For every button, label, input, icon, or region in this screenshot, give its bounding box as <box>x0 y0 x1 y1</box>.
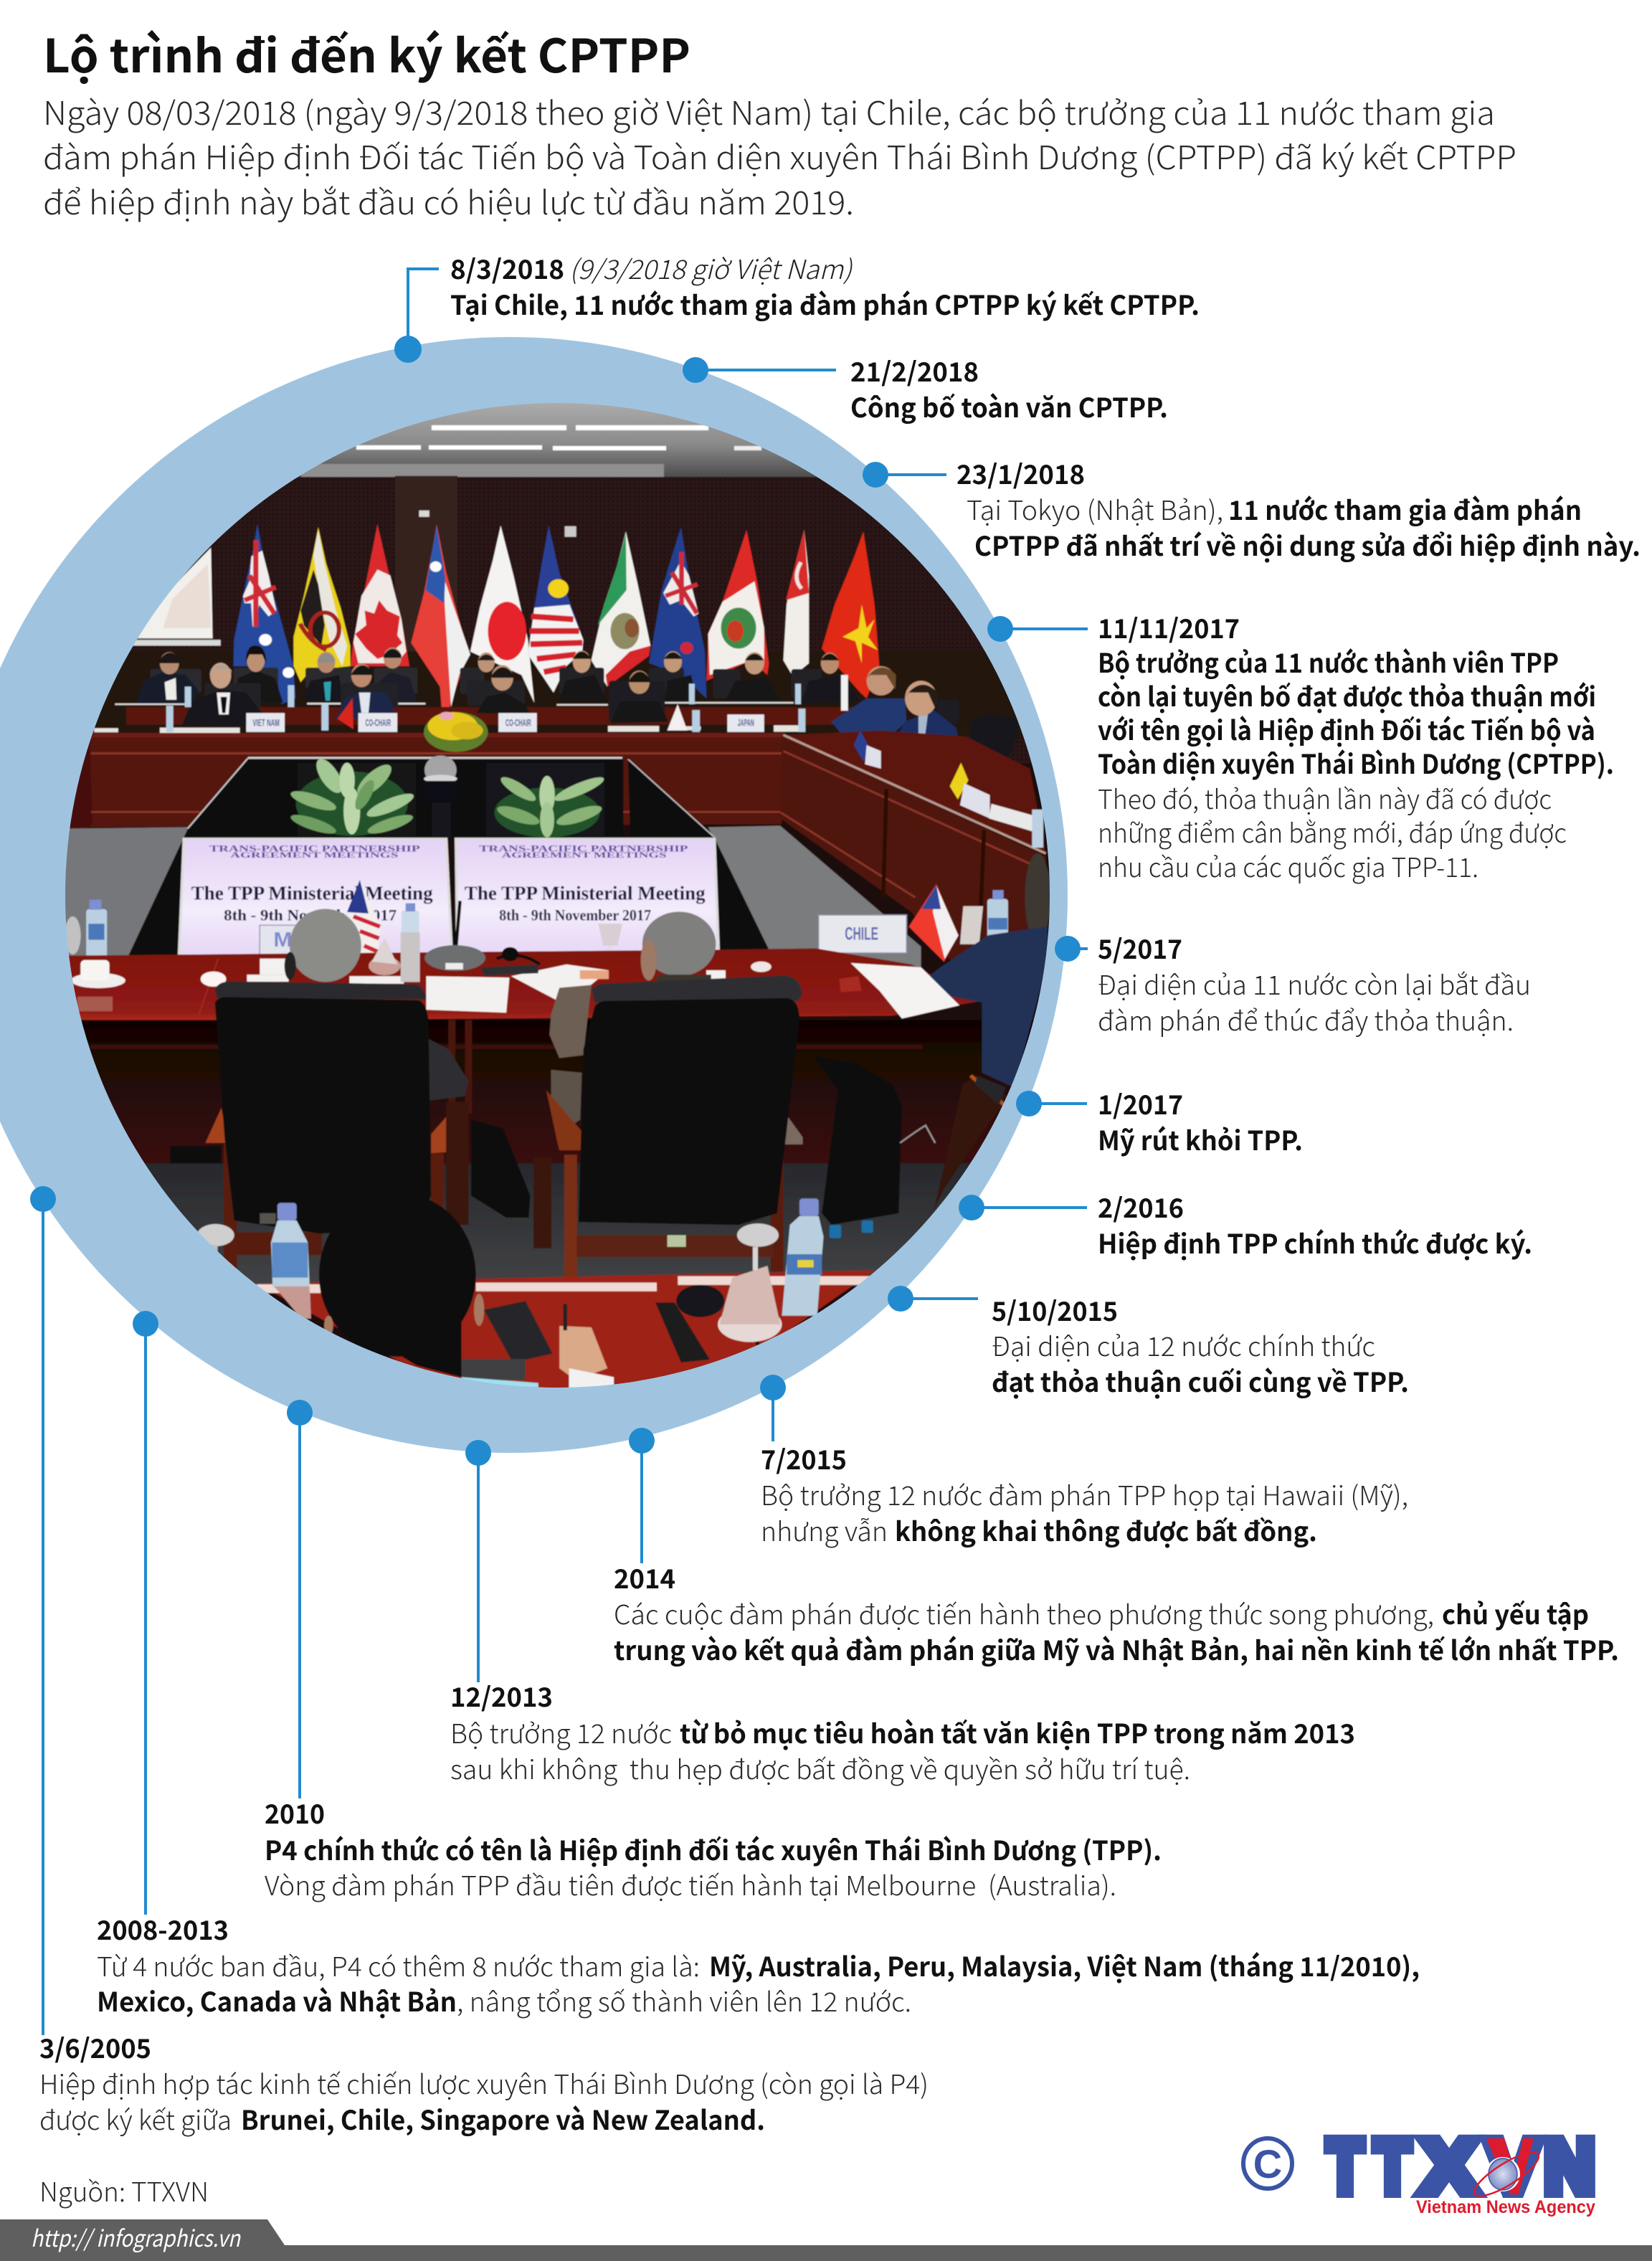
date: 5/10/2015 <box>992 1290 1118 1329</box>
foreground glass and ashtray <box>718 1223 782 1342</box>
description: Hiệp định hợp tác kinh tế chiến lược xuyên Thái Bình Dương (còn gọi là P4) <box>39 2063 929 2102</box>
description: Theo đó, thỏa thuận lần này đã có được <box>1098 778 1552 817</box>
description: P4 chính thức có tên là Hiệp định đối tác xuyên Thái Bình Dương (TPP). <box>265 1829 1162 1868</box>
description: , nâng tổng số thành viên lên 12 nước. <box>457 1981 911 2019</box>
description: Toàn diện xuyên Thái Bình Dương (CPTPP). <box>1098 743 1614 782</box>
connector and dot <box>959 1195 1087 1220</box>
floor left <box>65 826 189 957</box>
description: Tại Tokyo (Nhật Bản), <box>967 489 1223 528</box>
description: với tên gọi là Hiệp định Đối tác Tiến bộ và <box>1098 709 1595 748</box>
table bottle and glass at right <box>960 890 1008 952</box>
left TPP screen: The TPP Ministerial Meeting <box>191 883 433 904</box>
description <box>967 489 1641 564</box>
desk bottle near screens <box>402 904 419 966</box>
intro paragraph: để hiệp định này bắt đầu có hiệu lực từ đầu năm 2019. <box>43 177 854 224</box>
left plant <box>288 755 417 838</box>
right plant <box>494 773 607 838</box>
wine glass on the left <box>197 1224 234 1263</box>
bottles on back table <box>165 683 807 733</box>
luggage <box>812 1055 935 1238</box>
description: Từ 4 nước ban đầu, P4 có thêm 8 nước tham gia là: <box>97 1945 700 1984</box>
description: được ký kết giữa <box>39 2099 232 2138</box>
description: nhưng vẫn <box>761 1510 888 1549</box>
intro paragraph: Ngày 08/03/2018 (ngày 9/3/2018 theo giờ Việt Nam) tại Chile, các bộ trưởng của 11 nước tham gia <box>43 87 1495 134</box>
date: 21/2/2018 <box>850 351 979 389</box>
date: (9/3/2018 giờ Việt Nam) <box>569 248 853 287</box>
foreground left bottle <box>271 1203 311 1319</box>
flags row <box>234 524 879 707</box>
connector and dot <box>1016 1091 1087 1117</box>
water glass by right screen <box>598 924 622 966</box>
blue ring behind photo <box>0 337 1068 1453</box>
date: 5/2017 <box>1098 928 1182 967</box>
description: Đại diện của 12 nước chính thức <box>992 1325 1375 1364</box>
description: Bộ trưởng 12 nước đàm phán TPP họp tại Hawaii (Mỹ), <box>761 1474 1408 1513</box>
paper at right of table <box>850 963 959 1018</box>
timeline event: 5/10/2015 <box>888 1286 1409 1400</box>
timeline event: 7/2015 <box>760 1375 1408 1549</box>
country name cards: JAPAN <box>738 718 754 729</box>
connector and dot <box>629 1428 655 1563</box>
timeline event: 21/2/2018 <box>683 351 1168 425</box>
foreground head <box>319 1193 484 1377</box>
description: nhu cầu của các quốc gia TPP-11. <box>1098 846 1478 885</box>
right navy-suited delegate <box>919 853 1050 1087</box>
left seated man head <box>285 909 361 982</box>
back table panel <box>90 736 782 827</box>
timeline event: 2/2016 <box>959 1187 1532 1261</box>
connector and dot <box>888 1286 978 1312</box>
upper back table <box>115 703 859 725</box>
description <box>265 1829 1162 1903</box>
Malaysia desk flag <box>346 880 381 974</box>
timeline event: 23/1/2018 <box>863 453 1641 564</box>
left chair back <box>215 982 431 1233</box>
description <box>614 1593 1619 1668</box>
date: 8/3/2018 <box>450 248 564 287</box>
left TPP screen: TRANS-PACIFIC PARTNERSHIP <box>209 844 420 854</box>
country name cards <box>246 713 764 732</box>
TTXVN logo <box>1327 2125 1595 2217</box>
left chair wooden frame <box>205 1102 468 1269</box>
circular photo: ministers at conference table <box>65 403 1050 1388</box>
front table <box>65 948 982 1021</box>
connector and dot <box>987 616 1088 642</box>
timeline event: 2014 <box>614 1428 1619 1668</box>
timeline event: 5/2017 <box>1055 928 1531 1038</box>
title: Lộ trình đi đến ký kết CPTPP <box>43 20 690 86</box>
description: Công bố toàn văn CPTPP. <box>850 387 1168 425</box>
right chair back <box>579 975 802 1225</box>
date: 12/2013 <box>450 1676 553 1715</box>
phone and notebook <box>462 1301 553 1388</box>
desk flags <box>338 698 688 731</box>
description: đạt thỏa thuận cuối cùng về TPP. <box>992 1361 1409 1400</box>
right TPP screen: The TPP Ministerial Meeting <box>465 883 706 904</box>
description: Bộ trưởng của 11 nước thành viên TPP <box>1098 642 1559 681</box>
date: 23/1/2018 <box>956 453 1085 492</box>
description: không khai thông được bất đồng. <box>895 1510 1317 1549</box>
description: Mỹ, Australia, Peru, Malaysia, Việt Nam (tháng 11/2010), <box>709 1945 1420 1984</box>
description: sau khi không thu hẹp được bất đồng về quyền sở hữu trí tuệ. <box>450 1748 1190 1787</box>
description <box>992 1325 1409 1400</box>
description: đàm phán để thúc đẩy thỏa thuận. <box>1098 1000 1514 1038</box>
flower arrangement <box>424 712 488 752</box>
description: Mỹ rút khỏi TPP. <box>1098 1119 1303 1158</box>
place card with letter M <box>260 925 300 966</box>
timeline event: 8/3/2018 <box>394 248 1200 363</box>
right TPP screen: AGREEMENT MEETINGS <box>502 851 667 860</box>
description: Brunei, Chile, Singapore và New Zealand. <box>241 2099 765 2138</box>
Chile name card: CHILE <box>845 924 878 944</box>
country name cards: CO-CHAIR <box>505 718 531 729</box>
description: Tại Chile, 11 nước tham gia đàm phán CPTPP ký kết CPTPP. <box>450 284 1200 323</box>
date: 3/6/2005 <box>39 2027 151 2066</box>
description <box>450 1712 1355 1787</box>
connector and dot <box>133 1311 158 1915</box>
date: 2014 <box>614 1558 675 1596</box>
right chair wooden frame <box>533 1090 802 1278</box>
description: Đại diện của 11 nước còn lại bắt đầu <box>1098 964 1531 1002</box>
TTXVN logo: N <box>1544 2125 1595 2209</box>
connector and dot <box>760 1375 786 1441</box>
source note: Nguồn: TTXVN <box>39 2171 209 2209</box>
projection screen <box>133 546 222 647</box>
date: 11/11/2017 <box>1098 607 1240 646</box>
connector and dot <box>683 357 836 383</box>
description: Các cuộc đàm phán được tiến hành theo phương thức song phương, <box>614 1593 1434 1632</box>
foreground right bottle <box>782 1198 823 1316</box>
base of place card and papers <box>247 959 726 1013</box>
connector and dot <box>30 1186 56 2035</box>
ceiling with lights <box>298 403 817 478</box>
left TPP screen <box>179 839 452 970</box>
intro paragraph: đàm phán Hiệp định Đối tác Tiến bộ và Toàn diện xuyên Thái Bình Dương (CPTPP) đã ký kết CPTPP <box>43 132 1516 179</box>
description: Vòng đàm phán TPP đầu tiên được tiến hành tại Melbourne (Australia). <box>265 1864 1116 1903</box>
lower photo scene <box>65 853 1050 1389</box>
country name cards: VIET NAM <box>252 718 280 729</box>
timeline event: 11/11/2017 <box>987 607 1614 885</box>
left TPP screen: 8th - 9th November 2017 <box>224 906 397 924</box>
description: 11 nước tham gia đàm phán <box>1228 489 1582 528</box>
description: trung vào kết quả đàm phán giữa Mỹ và Nhật Bản, hai nền kinh tế lớn nhất TPP. <box>614 1629 1619 1668</box>
delegates seated at front row <box>182 663 668 726</box>
place card with letter M: M <box>273 929 292 952</box>
date: 1/2017 <box>1098 1084 1183 1122</box>
connector and dot <box>287 1400 313 1798</box>
timeline event: 1/2017 <box>1016 1084 1303 1158</box>
description <box>1098 964 1531 1038</box>
timeline event: 2010 <box>265 1400 1162 1903</box>
left seated man shoulder <box>426 1038 468 1101</box>
date: 2/2016 <box>1098 1187 1184 1226</box>
connector and dot <box>1055 936 1088 962</box>
description: Hiệp định TPP chính thức được ký. <box>1098 1223 1532 1261</box>
left TPP screen: AGREEMENT MEETINGS <box>230 851 398 860</box>
left edge bottle and glass <box>65 900 107 964</box>
footer bar <box>0 2219 1652 2261</box>
connector and dot <box>863 462 946 488</box>
wooden chair lower right <box>934 1076 1007 1210</box>
Chile name card <box>819 915 906 953</box>
hand with pen <box>559 1304 614 1389</box>
timeline event: 12/2013 <box>450 1440 1355 1787</box>
description: CPTPP đã nhất trí về nội dung sửa đổi hiệp định này. <box>974 525 1641 564</box>
under front table <box>77 1020 1038 1172</box>
camera on stand <box>422 755 457 838</box>
carpet <box>128 1163 993 1286</box>
description: chủ yếu tập <box>1442 1593 1589 1632</box>
TTXVN logo: Vietnam News Agency <box>1416 2197 1595 2217</box>
date: 7/2015 <box>761 1438 847 1477</box>
right seated man <box>549 911 716 1134</box>
floor right <box>708 825 921 974</box>
description <box>39 2063 929 2138</box>
intro paragraph <box>43 87 1516 224</box>
TTXVN logo: T <box>1375 2125 1410 2209</box>
connector and dot <box>394 269 439 363</box>
right-hand delegates <box>830 665 1017 759</box>
date <box>450 248 853 287</box>
cup and saucer <box>71 960 125 988</box>
delegates behind the table <box>136 645 860 706</box>
description <box>761 1474 1408 1549</box>
date: 2010 <box>265 1793 325 1831</box>
table microphone stalk <box>455 901 460 967</box>
date: 2008-2013 <box>97 1909 229 1948</box>
TTXVN logo: V <box>1486 2125 1539 2209</box>
timeline event: 2008-2013 <box>97 1311 1420 2019</box>
country name cards: CO-CHAIR <box>365 718 391 729</box>
description: những điểm cân bằng mới, đáp ứng được <box>1098 812 1567 850</box>
foreground headset <box>655 1285 758 1362</box>
right TPP screen: 8th - 9th November 2017 <box>499 906 651 924</box>
ashtray, desk bottle, microphone, headset <box>369 932 540 982</box>
central black monitors and dividers <box>123 757 779 970</box>
connector and dot <box>465 1440 491 1682</box>
foreground table <box>257 1270 875 1389</box>
description <box>97 1945 1420 2019</box>
papers on back table <box>94 725 802 733</box>
copyright mark <box>1243 2138 1292 2189</box>
right angled table <box>780 731 1046 967</box>
copyright mark: C <box>1253 2141 1282 2186</box>
description: còn lại tuyên bố đạt được thỏa thuận mới <box>1098 676 1596 714</box>
timeline event: 3/6/2005 <box>30 1186 929 2138</box>
upper photo scene <box>65 475 1047 968</box>
footer bar: http:// infographics.vn <box>31 2221 241 2254</box>
description: Mexico, Canada và Nhật Bản <box>97 1981 457 2019</box>
TTXVN logo: X <box>1421 2125 1477 2209</box>
TTXVN logo: T <box>1327 2125 1363 2209</box>
description: từ bỏ mục tiêu hoàn tất văn kiện TPP trong năm 2013 <box>680 1712 1355 1751</box>
description: Bộ trưởng 12 nước <box>450 1712 672 1751</box>
right TPP screen: TRANS-PACIFIC PARTNERSHIP <box>479 844 688 854</box>
right TPP screen <box>456 839 719 970</box>
description <box>1098 642 1614 885</box>
bag under table <box>471 1119 531 1218</box>
wall <box>130 478 1032 764</box>
Chile flag on table <box>909 884 958 962</box>
